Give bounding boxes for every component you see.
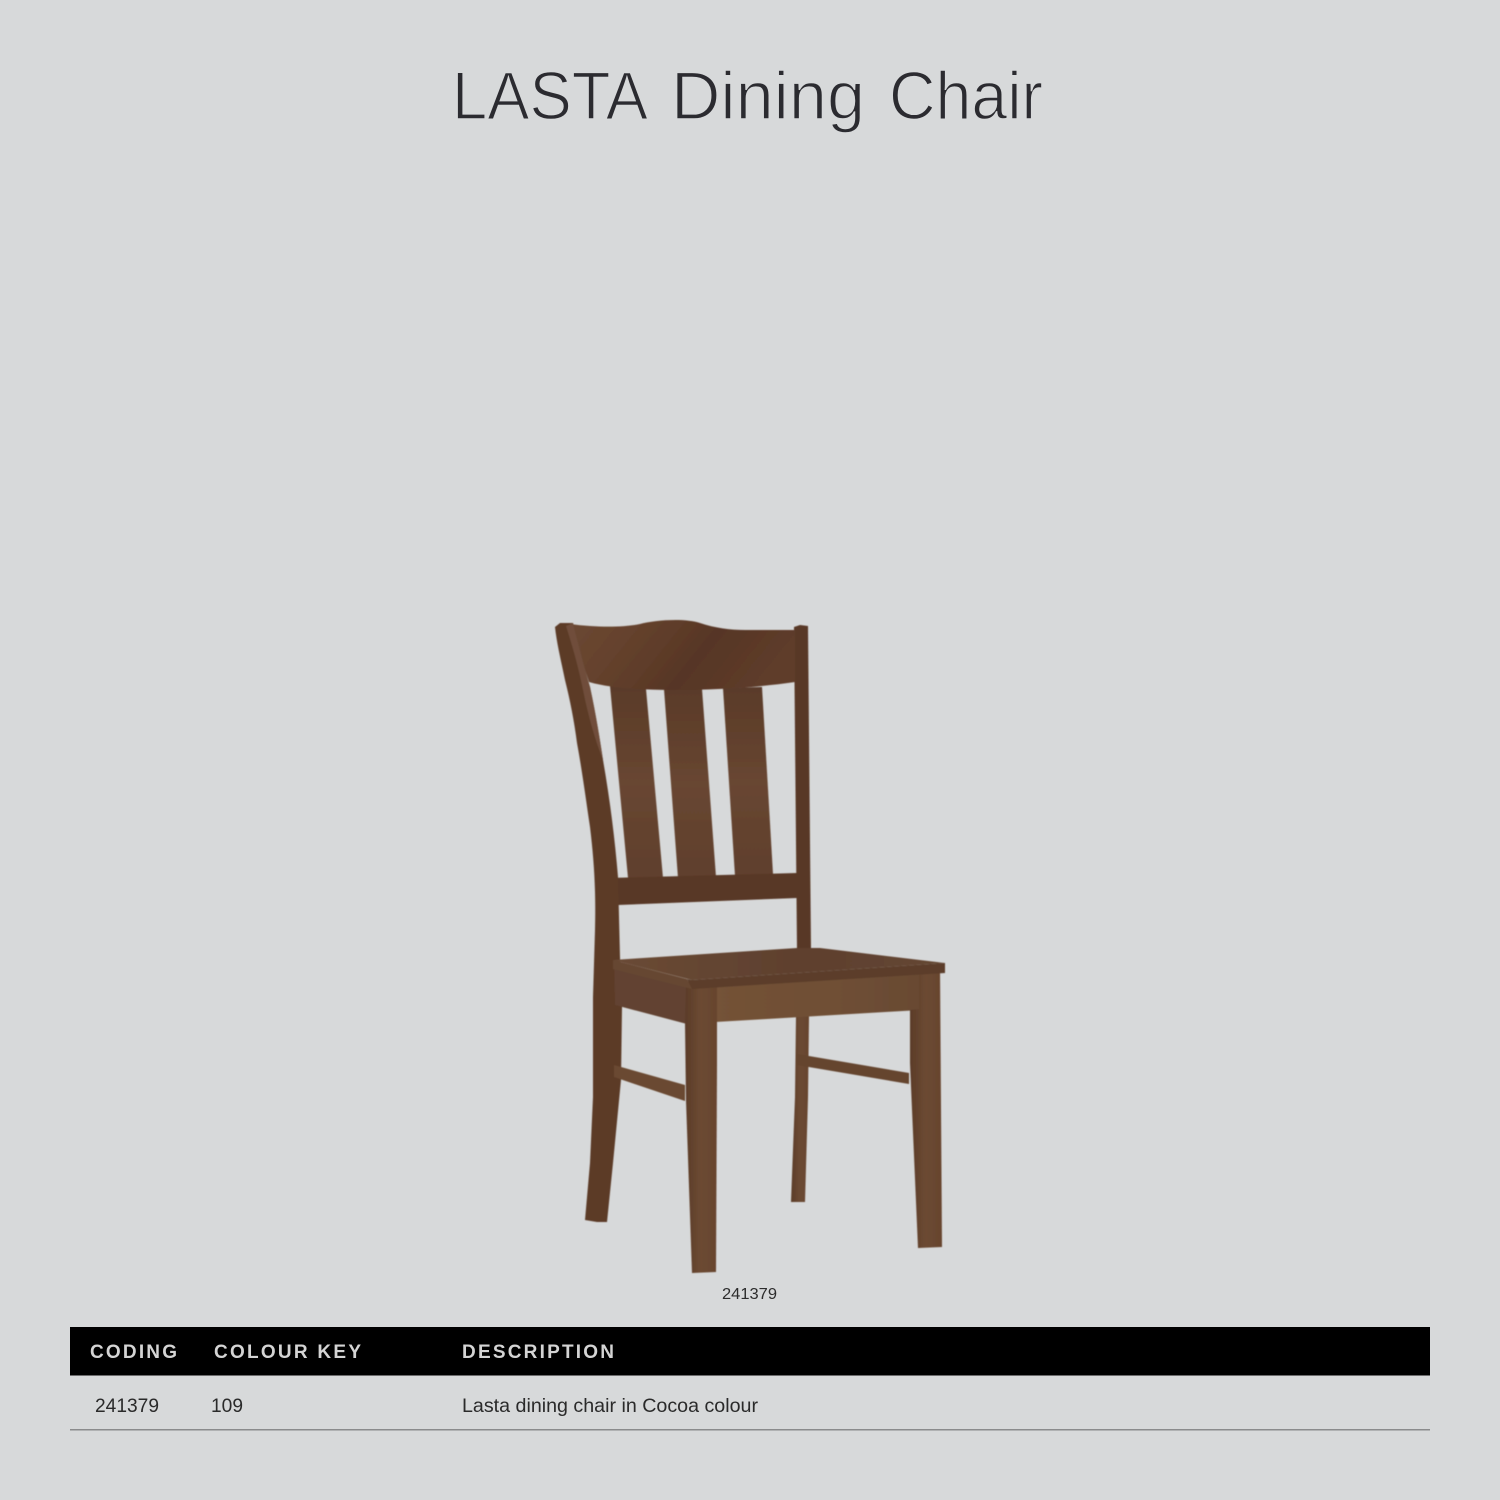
table [70,1327,1430,1430]
right back post [794,625,811,950]
left back post and leg [555,623,622,1222]
row: description value: Lasta dining chair in Cocoa colour [462,1395,759,1417]
row: coding value: 241379 [95,1395,159,1417]
table header bar [70,1327,1430,1376]
chair illustration [555,620,945,1273]
header: description: DESCRIPTION [462,1342,614,1363]
right stretcher [797,1054,909,1084]
left apron [614,962,690,1024]
front apron [715,968,920,1022]
title word: LASTA: LASTA [452,58,649,134]
title [452,58,1043,134]
title word: Chair: Chair [889,58,1043,134]
row rule [70,1429,1430,1430]
row: colour key value: 109 [211,1395,243,1417]
title word: Dining: Dining [671,58,865,134]
header: colour key: COLOUR KEY [214,1342,361,1363]
seat top [613,948,945,980]
seat left edge [613,960,692,989]
left post highlight [566,623,603,760]
left stretcher [614,1065,685,1101]
lower back rail [608,873,797,905]
product code caption: 241379 [722,1286,777,1303]
seat front edge [687,963,945,989]
front right leg [910,968,942,1248]
back slats [610,686,773,878]
top rail [570,620,795,690]
front left leg [685,984,717,1273]
header: coding: CODING [90,1342,177,1363]
back right leg [791,1016,809,1202]
